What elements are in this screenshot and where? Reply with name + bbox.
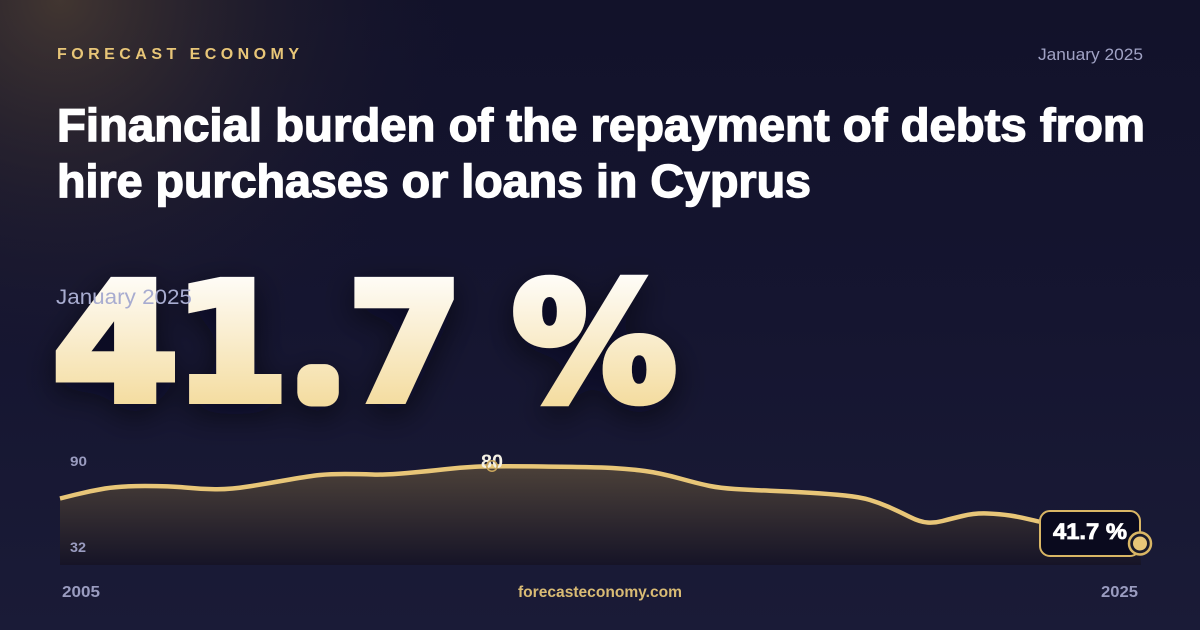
title: Financial burden of the repayment of debts from	[57, 99, 1145, 151]
x axis end year: 2025	[1101, 584, 1138, 601]
current value callout: 41.7 %	[1053, 519, 1127, 544]
chart area fill	[60, 466, 1141, 565]
big value: 1	[174, 250, 288, 438]
date top right: January 2025	[1038, 46, 1143, 64]
chart line	[60, 466, 1140, 543]
peak marker	[487, 461, 497, 471]
y axis max label: 90	[70, 453, 87, 469]
current value callout	[1040, 511, 1140, 556]
title: hire purchases or loans in Cyprus	[57, 155, 811, 207]
title	[57, 99, 1145, 207]
x axis start year: 2005	[62, 584, 100, 601]
big value	[53, 250, 676, 438]
peak label: 80	[481, 452, 503, 473]
big value: .	[304, 322, 332, 411]
current value marker	[1129, 532, 1151, 554]
y axis min label: 32	[70, 539, 86, 555]
big value: 4	[53, 250, 178, 438]
source url: forecasteconomy.com	[518, 584, 682, 601]
brand label: FORECAST ECONOMY	[57, 46, 299, 63]
big value: %	[512, 250, 676, 438]
big value date caption: January 2025	[56, 285, 192, 309]
area chart	[60, 452, 1151, 565]
big value: 7	[348, 250, 462, 438]
